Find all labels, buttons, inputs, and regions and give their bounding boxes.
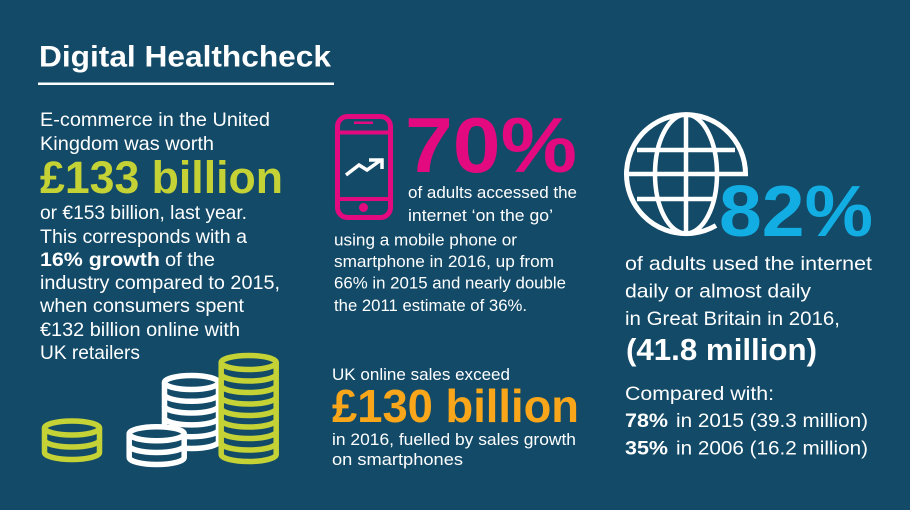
title: Digital Healthcheck <box>39 40 331 74</box>
text block: daily internet use: of adults used the internet <box>625 253 873 275</box>
text block: comparison figures <box>625 383 868 460</box>
text block: daily internet use: (41.8 million) <box>626 332 817 367</box>
text block: e-commerce worth: E-commerce in the United <box>40 109 270 131</box>
text block: mobile access: using a mobile phone or <box>334 232 518 250</box>
icon: small green coin stack <box>44 421 100 459</box>
text block: UK online sales <box>332 366 579 469</box>
text block: e-commerce worth: UK retailers <box>40 342 140 364</box>
text block: e-commerce worth <box>39 109 283 364</box>
icon: tall green coin stack <box>221 356 276 461</box>
text block: mobile access: smartphone in 2016, up from <box>334 253 554 271</box>
text block: daily internet use <box>625 253 873 367</box>
text block: mobile access: of adults accessed the <box>408 184 577 202</box>
text block: comparison figures: 35% <box>625 438 668 460</box>
big number: 70%: 70% <box>405 101 577 189</box>
text block: UK online sales: UK online sales exceed <box>332 366 510 384</box>
icon: back white coin stack <box>164 376 218 448</box>
text block: e-commerce worth: 16% growth <box>40 249 160 271</box>
text block: e-commerce worth: Kingdom was worth <box>40 133 214 155</box>
icon: coin stacks <box>44 356 276 465</box>
text block: UK online sales: on smartphones <box>332 451 463 469</box>
text block: daily internet use: in Great Britain in 2016, <box>625 308 840 330</box>
text block: comparison figures: Compared with: <box>625 383 774 405</box>
icon: front white coin stack <box>129 427 184 465</box>
text block: e-commerce worth: of the <box>165 249 215 271</box>
text block: e-commerce worth: industry compared to 2015, <box>40 272 280 294</box>
text block: e-commerce worth: or €153 billion, last year. <box>40 202 247 224</box>
text block: e-commerce worth: when consumers spent <box>39 295 245 317</box>
big number: 82%: 82% <box>719 172 873 252</box>
text block: comparison figures: in 2006 (16.2 million) <box>676 438 868 460</box>
text block: daily internet use: daily or almost daily <box>625 280 811 302</box>
icon: globe <box>626 114 748 234</box>
big number: 133 billion: £133 billion <box>40 152 283 203</box>
icon: smartphone with rising arrow <box>337 116 391 218</box>
text block: e-commerce worth: This corresponds with a <box>40 226 247 248</box>
text block: mobile access: the 2011 estimate of 36%. <box>334 297 527 315</box>
text block: mobile access: internet ‘on the go’ <box>408 207 553 225</box>
text block: mobile access: 66% in 2015 and nearly double <box>334 274 566 292</box>
text block: comparison figures: 78% <box>625 410 668 432</box>
text block: mobile access <box>334 184 577 315</box>
text block: e-commerce worth: €132 billion online with <box>40 319 240 341</box>
text block: UK online sales: in 2016, fuelled by sales growth <box>332 431 576 449</box>
text block: comparison figures: in 2015 (39.3 million) <box>676 410 868 432</box>
big number: 130 billion: £130 billion <box>332 380 579 432</box>
